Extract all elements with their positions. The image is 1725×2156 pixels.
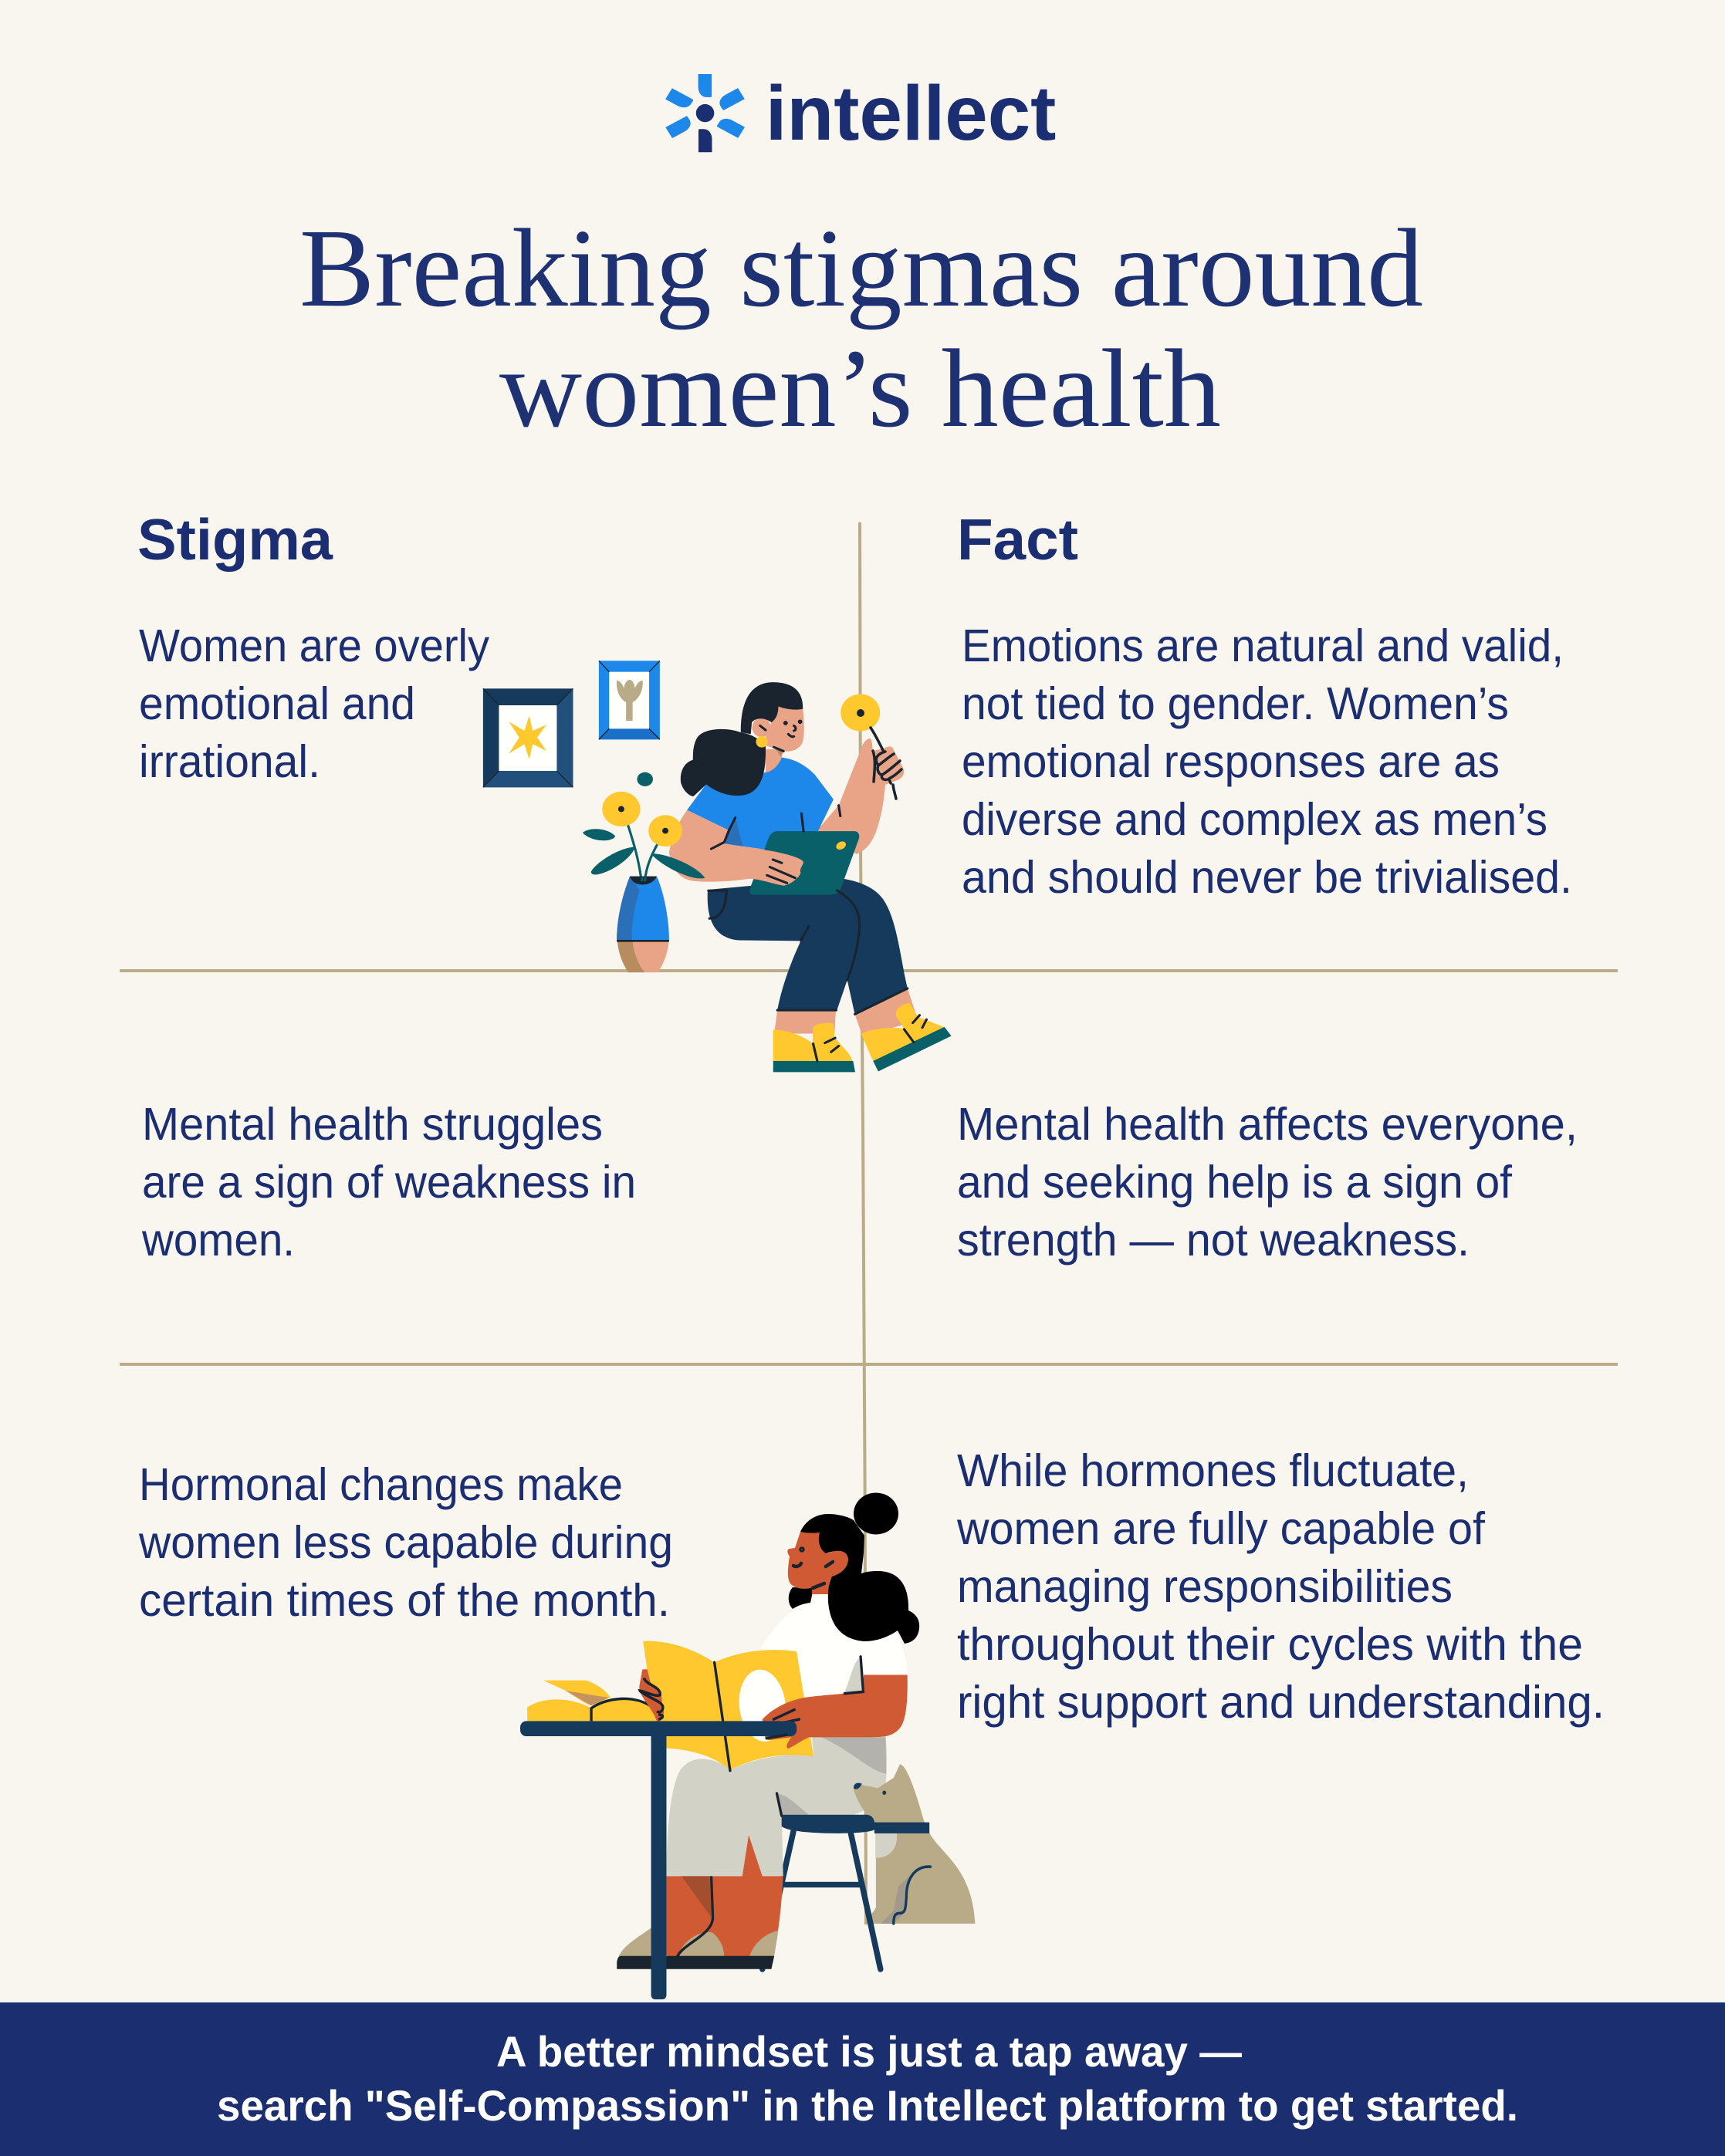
- woman figure: [669, 682, 952, 1072]
- stigma text 3: certain times of the month.: [139, 1575, 670, 1626]
- title: [299, 207, 1423, 451]
- stigma text 2: are a sign of weakness in: [142, 1157, 636, 1208]
- footer text: A better mindset is just a tap away —: [496, 2027, 1242, 2076]
- stigma text 1: emotional and: [139, 678, 415, 729]
- face: [766, 705, 804, 752]
- hair bun: [681, 729, 766, 796]
- stigma text 1: Women are overly: [139, 620, 489, 671]
- title: women’s health: [499, 327, 1221, 451]
- shirt: [687, 758, 834, 851]
- trousers: [666, 1735, 887, 1876]
- stigma text 2: women.: [141, 1215, 295, 1266]
- fact text 3: managing responsibilities: [957, 1561, 1453, 1612]
- book on table: [543, 1681, 611, 1705]
- stigma text 2: Mental health struggles: [142, 1099, 603, 1150]
- fact text 1: [962, 620, 1572, 903]
- stigma text 3: women less capable during: [138, 1517, 673, 1568]
- fact text 1: not tied to gender. Women’s: [962, 678, 1509, 729]
- logo wordmark: intellect: [766, 69, 1056, 156]
- fact text 2: strength — not weakness.: [957, 1215, 1470, 1266]
- fact text 2: Mental health affects everyone,: [957, 1099, 1578, 1150]
- raised arm: [817, 738, 904, 854]
- heading: stigma: Stigma: [137, 507, 333, 572]
- stigma text 3: [138, 1459, 673, 1626]
- illustration: woman sitting with tablet: [483, 661, 952, 1072]
- neck: [766, 749, 783, 773]
- fact text 2: and seeking help is a sign of: [957, 1157, 1513, 1208]
- footer text: [217, 2027, 1518, 2130]
- logo: intellect: [665, 69, 1056, 156]
- fact text 1: Emotions are natural and valid,: [962, 620, 1564, 671]
- chair back legs: [763, 1831, 860, 1969]
- fact text 1: and should never be trivialised.: [962, 852, 1572, 903]
- facial details: [709, 721, 926, 1061]
- icon: blue picture frame: [599, 661, 660, 739]
- stigma text 3: Hormonal changes make: [139, 1459, 623, 1510]
- fact text 1: diverse and complex as men’s: [962, 794, 1547, 845]
- ankles: [774, 1010, 836, 1033]
- left hand: [639, 1669, 664, 1721]
- illustration: woman reading at table with dog: [520, 1492, 975, 1999]
- heading: fact: Fact: [957, 507, 1078, 572]
- open book: [643, 1641, 813, 1770]
- table: [651, 1728, 666, 1999]
- stigma text 2: [141, 1099, 636, 1266]
- footer banner: [0, 2002, 1725, 2156]
- right arm: [763, 1675, 908, 1749]
- chair seat and front leg: [782, 1815, 881, 1969]
- dog: [854, 1764, 975, 1924]
- fact text 3: [956, 1445, 1605, 1728]
- icon: logo burst: [665, 74, 745, 152]
- footer text: search "Self-Compassion" in the Intellect platform to get started.: [217, 2081, 1518, 2130]
- title: Breaking stigmas around: [299, 207, 1423, 330]
- shirt: [761, 1593, 908, 1698]
- fact text 1: emotional responses are as: [962, 736, 1500, 787]
- shoes: [773, 1023, 852, 1061]
- stigma text 1: irrational.: [139, 736, 320, 787]
- fact text 3: right support and understanding.: [957, 1677, 1605, 1728]
- fact text 3: While hormones fluctuate,: [957, 1445, 1469, 1496]
- icon: navy picture frame: [483, 688, 573, 787]
- woman figure: [520, 1593, 908, 1999]
- arm on tablet: [669, 810, 803, 886]
- shoes: [618, 1928, 668, 1957]
- flower held in hand: [841, 694, 901, 799]
- head and hair: [787, 1492, 919, 1644]
- fact text 2: [957, 1099, 1578, 1266]
- fact text 3: women are fully capable of: [956, 1503, 1486, 1554]
- tablet: [749, 831, 859, 894]
- legs: [666, 1835, 783, 1957]
- stigma text 1: [139, 620, 489, 787]
- icon: flower vase: [583, 772, 705, 972]
- trousers: [708, 878, 908, 1014]
- fact text 3: throughout their cycles with the: [957, 1619, 1583, 1670]
